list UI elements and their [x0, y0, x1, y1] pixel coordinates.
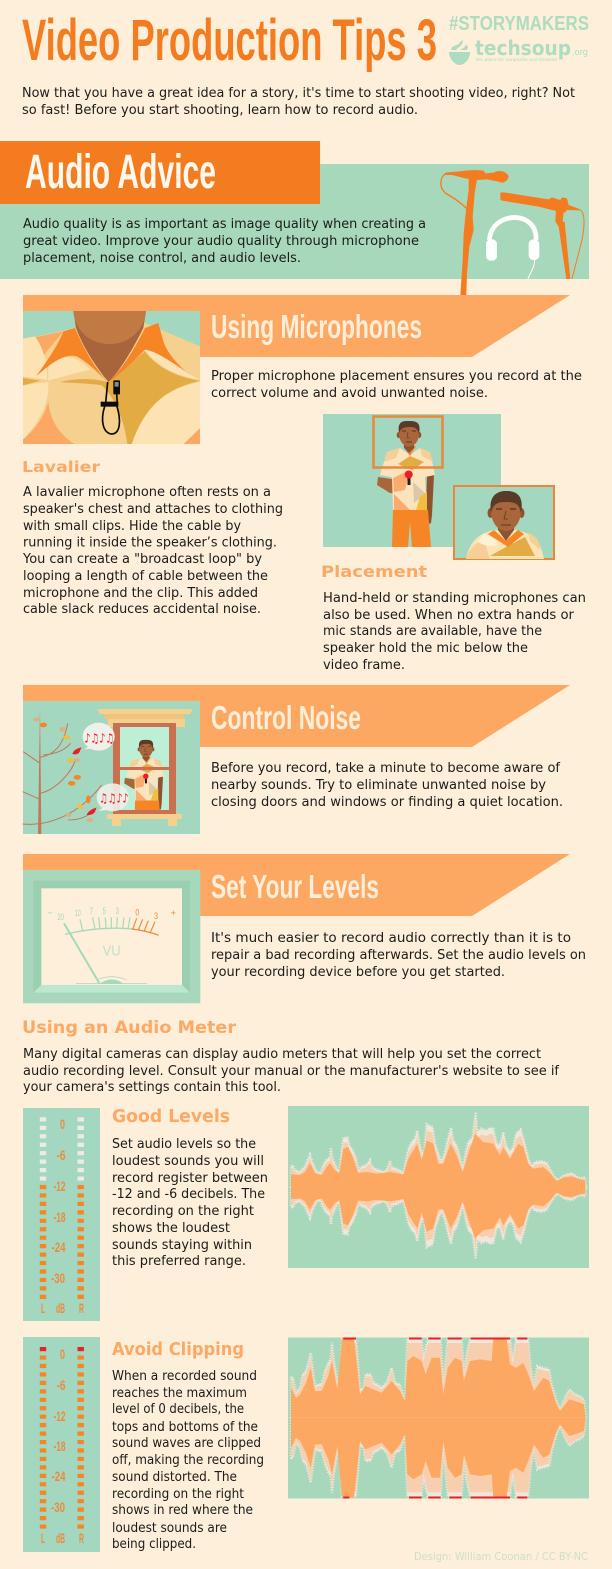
- meter: good levels: -24: [52, 1239, 66, 1255]
- placement text: [323, 591, 586, 673]
- icon: microphones: [441, 170, 584, 295]
- meter: good levels: -30: [51, 1270, 65, 1286]
- waveform: clipping: [288, 1338, 589, 1498]
- section banner: set your levels: [23, 854, 570, 916]
- avoid clipping text: loudest sounds are: [112, 1521, 227, 1536]
- placement text: also be used. When no extra hands or: [323, 608, 575, 623]
- window with speaker: [97, 709, 193, 826]
- meter: good levels: -12: [54, 1178, 66, 1194]
- audio advice text: Audio quality is as important as image quality when creating a: [23, 217, 426, 232]
- lavalier text: cable slack reduces accidental noise.: [23, 602, 261, 617]
- avoid clipping text: sound waves are clipped: [112, 1436, 261, 1451]
- control noise text: closing doors and windows or finding a quiet location.: [211, 795, 563, 810]
- audio meter text: Many digital cameras can display audio meters that will help you set the correct: [23, 1047, 541, 1062]
- techsoup logo: the place for nonprofits and libraries: [476, 57, 558, 62]
- intro text: Now that you have a great idea for a story, it's time to start shooting video, right? Not: [22, 86, 575, 101]
- techsoup logo: techsoup: [475, 36, 571, 60]
- lavalier text: speaker's chest and attaches to clothing: [23, 502, 283, 517]
- lavalier text: running it inside the speaker’s clothing.: [23, 536, 277, 550]
- lavalier text: [22, 485, 283, 617]
- audio advice text: [23, 217, 426, 266]
- using microphones text: Proper microphone placement ensures you record at the: [211, 369, 582, 384]
- control noise text: nearby sounds. Try to eliminate unwanted noise by: [211, 778, 546, 793]
- speaker holding microphone: [377, 421, 435, 547]
- good levels text: sounds staying within: [112, 1238, 252, 1253]
- good levels text: this preferred range.: [112, 1254, 246, 1269]
- frame: wide shot: [374, 416, 442, 468]
- design credit: Design: William Coonan / CC BY-NC: [414, 1551, 588, 1563]
- meter: avoid clipping: dB: [56, 1530, 65, 1546]
- good levels text: [112, 1137, 268, 1269]
- set your levels text: [211, 931, 586, 980]
- illustration: VU meter: 20: [57, 912, 64, 922]
- avoid clipping text: shows in red where the: [112, 1503, 253, 1518]
- set your levels text: It's much easier to record audio correctly than it is to: [211, 931, 571, 946]
- illustration: VU meter: +: [171, 908, 176, 918]
- avoid clipping text: being clipped.: [112, 1537, 196, 1552]
- heading banner: Audio Advice: [25, 146, 216, 199]
- good levels text: shows the loudest: [112, 1221, 230, 1236]
- illustration: VU meter: −: [47, 908, 53, 918]
- icon: headphones: [486, 217, 539, 279]
- using microphones text: [211, 369, 582, 401]
- icon: lavalier mic and cable loop: [101, 380, 120, 434]
- lavalier text: looping a length of cable between the: [23, 569, 268, 584]
- clipping markers in red: [343, 1338, 527, 1498]
- good levels text: record register between: [112, 1171, 268, 1186]
- meter: good levels: R: [79, 1300, 84, 1316]
- audio meter text: your camera's settings contain this tool.: [23, 1080, 281, 1095]
- section banner: set your levels: Set Your Levels: [211, 868, 379, 905]
- good levels text: -12 and -6 decibels. The: [112, 1187, 265, 1202]
- inset: close-up of speaker: [454, 486, 554, 559]
- control noise text: Before you record, take a minute to become aware of: [211, 761, 560, 776]
- using microphones text: correct volume and avoid unwanted noise.: [211, 386, 488, 401]
- placement text: video frame.: [323, 658, 405, 673]
- avoid clipping heading: Avoid Clipping: [112, 1339, 244, 1360]
- avoid clipping text: off, making the recording: [112, 1453, 264, 1468]
- meter: good levels: dB: [56, 1300, 65, 1316]
- meter: good levels: [23, 1108, 100, 1321]
- section banner: using microphones: [23, 295, 570, 357]
- placement heading: Placement: [321, 562, 427, 581]
- using an audio meter heading: Using an Audio Meter: [22, 1018, 237, 1038]
- audio advice text: great video. Improve your audio quality through microphone: [23, 234, 419, 249]
- meter: avoid clipping: -6: [56, 1377, 66, 1393]
- set your levels text: repair a bad recording afterwards. Set the audio levels on: [211, 948, 586, 963]
- illustration: VU meter: 10: [75, 908, 81, 918]
- illustration: placement framing: [323, 414, 554, 559]
- meter: avoid clipping: [23, 1337, 100, 1552]
- avoid clipping text: level of 0 decibels, the: [112, 1402, 244, 1417]
- lavalier text: with small clips. Hide the cable by: [23, 519, 241, 534]
- tree with birds and music notes: ♪♫♪♫: [84, 730, 114, 745]
- placement text: Hand-held or standing microphones can: [323, 591, 586, 606]
- meter: avoid clipping: L: [41, 1530, 45, 1546]
- control noise text: [211, 761, 563, 810]
- tree with birds and music notes: [23, 708, 129, 834]
- good levels text: loudest sounds you will: [112, 1154, 264, 1169]
- waveform: good levels: [288, 1106, 589, 1268]
- techsoup logo: .org: [572, 48, 588, 58]
- placement text: speaker hold the mic below the: [323, 641, 528, 656]
- meter: avoid clipping: -12: [54, 1408, 66, 1424]
- meter: good levels: L: [41, 1300, 45, 1316]
- placement text: mic stands are available, have the: [323, 624, 542, 639]
- lavalier heading: Lavalier: [22, 458, 100, 476]
- lavalier text: You can create a "broadcast loop" by: [22, 552, 262, 567]
- illustration: VU meter: 5: [103, 906, 106, 916]
- hashtag: #STORYMAKERS: [449, 13, 589, 35]
- meter: good levels: -18: [54, 1209, 66, 1225]
- meter: good levels: -6: [56, 1147, 66, 1163]
- lavalier text: A lavalier microphone often rests on a: [23, 485, 271, 500]
- meter: good levels: 0: [60, 1116, 65, 1132]
- audio advice text: placement, noise control, and audio levels.: [23, 251, 301, 266]
- illustration: VU meter: 7: [90, 906, 93, 916]
- meter: avoid clipping: -18: [54, 1438, 66, 1454]
- audio meter text: audio recording level. Consult your manual or the manufacturer's website to see if: [23, 1064, 559, 1079]
- techsoup logo: [449, 36, 588, 65]
- section banner: control noise: Control Noise: [211, 699, 361, 736]
- illustration: lavalier microphone on shirt: [23, 311, 200, 444]
- avoid clipping text: [112, 1369, 264, 1552]
- meter: avoid clipping: 0: [60, 1346, 65, 1362]
- illustration: noisy birds outside window: [23, 701, 200, 834]
- meter: avoid clipping: -30: [51, 1499, 65, 1515]
- tree with birds and music notes: ♫♫♪♪: [99, 791, 129, 806]
- avoid clipping text: tops and bottoms of the: [112, 1420, 258, 1435]
- section banner: using microphones: Using Microphones: [211, 308, 422, 345]
- intro text: [22, 86, 575, 118]
- section banner: control noise: [23, 685, 570, 747]
- good levels heading: Good Levels: [112, 1106, 230, 1127]
- audio meter text: [23, 1047, 559, 1095]
- illustration: VU meter: 0: [135, 907, 139, 917]
- avoid clipping text: sound distorted. The: [112, 1470, 237, 1485]
- set your levels text: your recording device before you get started.: [211, 965, 505, 980]
- illustration: VU meter: 3: [154, 911, 158, 921]
- meter: avoid clipping: -24: [52, 1468, 66, 1484]
- avoid clipping text: recording on the right: [112, 1487, 244, 1502]
- meter: avoid clipping: R: [79, 1530, 84, 1546]
- illustration: VU meter: 3: [116, 906, 119, 916]
- intro text: so fast! Before you start shooting, learn how to record audio.: [22, 103, 418, 118]
- avoid clipping text: When a recorded sound: [112, 1369, 257, 1384]
- good levels text: Set audio levels so the: [112, 1137, 256, 1152]
- panel: audio advice: [0, 141, 589, 295]
- good levels text: recording on the right: [112, 1204, 254, 1219]
- lavalier text: microphone and the clip. This added: [23, 586, 258, 601]
- illustration: VU meter: VU: [103, 944, 121, 960]
- avoid clipping text: reaches the maximum: [112, 1386, 247, 1401]
- illustration: VU meter: [23, 870, 200, 1003]
